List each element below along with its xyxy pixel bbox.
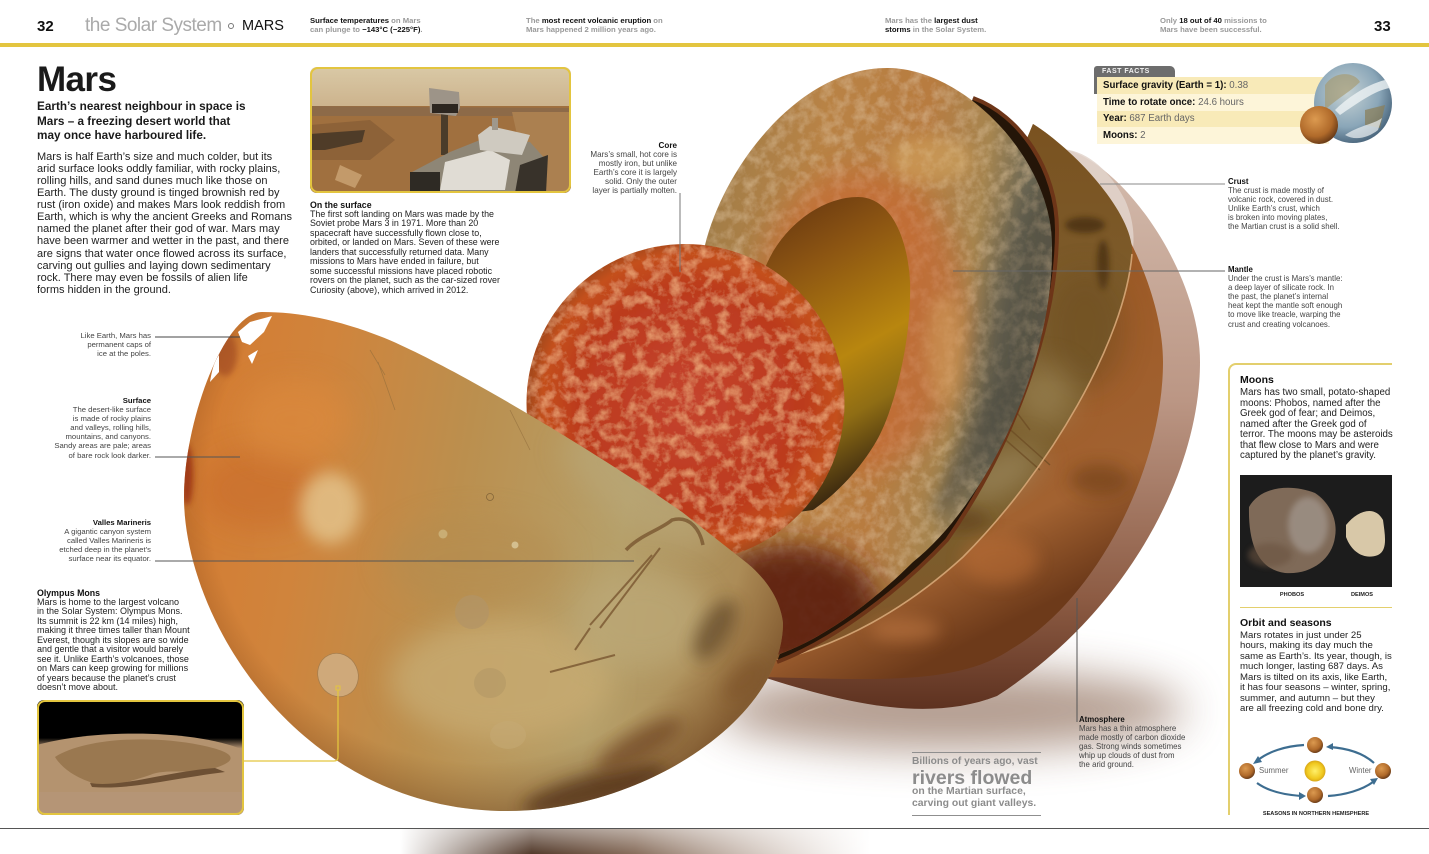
atmosphere label: Atmosphere (1079, 715, 1125, 724)
olympus mons photo (37, 700, 244, 815)
crust label: is broken into moving plates, (1228, 213, 1327, 222)
main body text: rock. There may even be fossils of alien life (37, 272, 248, 284)
moons text (1240, 387, 1393, 461)
fact row 4: Moons: 2 (1103, 130, 1146, 141)
rover body (412, 140, 546, 193)
surface label (54, 396, 151, 460)
orbit text: much longer, lasting 687 days. As (1240, 661, 1383, 672)
Valles Marineris canyon (626, 519, 703, 550)
moons text: Mars has two small, potato-shaped (1240, 387, 1390, 398)
core sphere (526, 244, 844, 562)
main body text: carving out gullies and laying down sedimentary (37, 260, 271, 272)
moons text: captured by the planet’s gravity. (1240, 450, 1376, 461)
phobos (1249, 488, 1336, 573)
intro: Earth’s nearest neighbour in space is (37, 100, 246, 113)
olympus mons body: doesn’t move about. (37, 682, 118, 692)
header fact 4: Mars have been successful. (1160, 25, 1262, 34)
on the surface body: rovers on the planet, such as the car-sized rover (310, 275, 500, 285)
crust label: Unlike Earth’s crust, which (1228, 204, 1320, 213)
section title: the Solar System (85, 15, 222, 36)
orbit text: hours, making its day much the (1240, 640, 1373, 651)
winter label: Winter (1349, 766, 1372, 775)
valles marineris label (59, 518, 151, 563)
mantle disc shading (736, 134, 1052, 654)
intro (37, 100, 246, 142)
moons text: Greek god of fear; and Deimos, (1240, 408, 1375, 419)
phobos caption: PHOBOS (1280, 592, 1304, 598)
shell surface markings (870, 217, 1130, 642)
polar caps label: permanent caps of (87, 340, 151, 349)
on the surface body: The first soft landing on Mars was made by the (310, 208, 494, 218)
core label: solid. Only the outer (605, 177, 677, 186)
rover head (429, 88, 460, 116)
valles marineris label: surface near its equator. (69, 554, 151, 563)
header fact 1: can plunge to −143°C (−225°F). (310, 25, 423, 34)
olympus mons body: in the Solar System: Olympus Mons. (37, 606, 183, 616)
pull quote: on the Martian surface, (912, 786, 1026, 797)
fast facts tab: FAST FACTS (1102, 68, 1150, 75)
moons heading: Moons (1240, 374, 1274, 386)
on the surface text (310, 200, 500, 295)
core cavity (740, 197, 910, 520)
atmosphere label: Mars has a thin atmosphere (1079, 724, 1176, 733)
olympus mons text (37, 588, 190, 692)
main body text: are signs that water once flowed across its surface, (37, 248, 286, 260)
main body text: rust (iron oxide) and makes Mars look reddish from (37, 199, 285, 211)
page number left: 32 (37, 18, 54, 35)
orbit diagram (1239, 737, 1391, 803)
dark plains (210, 458, 308, 526)
edge shading (184, 312, 783, 811)
on the surface body: Soviet probe Mars 3 in 1971. More than 20 (310, 218, 478, 228)
valles marineris label: etched deep in the planet’s (59, 545, 151, 554)
on the surface heading: On the surface (310, 200, 372, 210)
olympus mons body: Its summit is 22 km (14 miles) high, (37, 616, 178, 626)
on the surface body: orbited, or landed on Mars. Seven of these were (310, 237, 499, 247)
icon: earth (1314, 63, 1392, 143)
olympus mons body: and gentle that a visitor would barely (37, 644, 183, 654)
main body text: Earth. The dusty ground is tinged brownish red by (37, 187, 280, 199)
header fact 3 (885, 16, 986, 34)
header fact 4 (1160, 16, 1267, 34)
mantle label: Under the crust is Mars’s mantle: (1228, 274, 1343, 283)
crust label: Crust (1228, 177, 1248, 186)
pull quote: rivers flowed (912, 767, 1032, 789)
summer label: Summer (1259, 766, 1289, 775)
core label (590, 141, 677, 195)
olympus mons heading: Olympus Mons (37, 588, 100, 598)
mantle label: a deep layer of silicate rock. In (1228, 283, 1334, 292)
mantle label (1228, 265, 1343, 329)
fact row 3 (1097, 111, 1329, 127)
atmosphere label: made mostly of carbon dioxide (1079, 733, 1185, 742)
sun (1304, 760, 1326, 782)
fact row 2: Time to rotate once: 24.6 hours (1103, 97, 1244, 108)
pull quote: carving out giant valleys. (912, 798, 1036, 809)
polar caps label (80, 331, 152, 358)
surface label: and valleys, rolling hills, (70, 423, 151, 432)
surface texture lines (370, 350, 530, 450)
on the surface body: landers that successfully returned data. Many (310, 246, 489, 256)
main body text: Mars is half Earth’s size and much colder, but its (37, 151, 272, 163)
atmosphere layer (763, 149, 1200, 709)
tab edge (1094, 77, 1097, 94)
dark albedo regions (518, 758, 670, 811)
mars positions (1239, 737, 1391, 803)
orbit heading: Orbit and seasons (1240, 617, 1332, 629)
north polar ice (213, 332, 237, 376)
pale atmosphere highlight (1063, 149, 1134, 254)
orbit text: it has four seasons – winter, spring, (1240, 682, 1390, 693)
divider (1240, 607, 1392, 608)
Tharsis volcanoes (317, 653, 359, 697)
moons text: terror. The moons may be asteroids (1240, 429, 1393, 440)
rover photo (310, 67, 571, 193)
icon: mini mars (1300, 106, 1338, 144)
on the surface body: Curiosity (above), which arrived in 2012. (310, 284, 468, 294)
fact row 3: Year: 687 Earth days (1103, 113, 1195, 124)
surface label: is made of rocky plains (73, 414, 151, 423)
main body text: have been warmer and wetter in the past, and there (37, 235, 289, 247)
page baseline (0, 828, 1429, 829)
arrows (1257, 745, 1374, 796)
core label: Earth’s core it is largely (593, 168, 677, 177)
core label: Core (659, 141, 677, 150)
atmosphere label: the arid ground. (1079, 760, 1134, 769)
polar caps label: Like Earth, Mars has (80, 331, 151, 340)
polar caps label: ice at the poles. (97, 349, 151, 358)
olympus mons body: of years because the planet’s crust (37, 673, 176, 683)
orbit text: Mars rotates in just under 25 (1240, 630, 1362, 641)
olympus mons body: Mars is home to the largest volcano (37, 596, 179, 606)
header fact 3: storms in the Solar System. (885, 25, 986, 34)
fast facts (1094, 66, 1329, 144)
intro: Mars – a freezing desert world that (37, 114, 230, 128)
surface label: The desert-like surface (73, 405, 151, 414)
header fact 4: Only 18 out of 40 missions to (1160, 16, 1267, 25)
fast facts tab (1094, 66, 1175, 77)
header fact 3: Mars has the largest dust (885, 16, 978, 25)
orbit caption: SEASONS IN NORTHERN HEMISPHERE (1263, 811, 1369, 817)
ground shadow (400, 670, 1185, 854)
pull quote: Billions of years ago, vast (912, 756, 1038, 767)
surface label: Surface (123, 396, 151, 405)
mantle label: crust and creating volcanoes. (1228, 320, 1330, 329)
bullet (228, 23, 234, 29)
front hemisphere (184, 312, 783, 811)
crust thin edge line (777, 254, 1132, 660)
shell inner surface above crust line (760, 124, 1132, 660)
fact row 2 (1097, 94, 1329, 111)
core label: layer is partially molten. (592, 186, 677, 195)
fact row 1 (1097, 77, 1329, 94)
header fact 2 (526, 16, 663, 34)
moons text: that flew close to Mars and were (1240, 440, 1379, 450)
main body text: arid surface looks oddly familiar, with rocky plains, (37, 163, 280, 175)
header fact 1: Surface temperatures on Mars (310, 16, 421, 25)
deimos caption: DEIMOS (1351, 592, 1373, 598)
intro: may once have harboured life. (37, 129, 206, 142)
olympus mons body: on Mars can keep growing for millions (37, 663, 188, 673)
crust label: the Martian crust is a solid shell. (1228, 222, 1340, 231)
mantle disc (705, 68, 1052, 655)
pull quote (912, 752, 1041, 816)
header band rule (0, 43, 1429, 47)
icon: earth and mars size comparison (1300, 63, 1392, 144)
main body text: Earth, which is why the ancient Greeks and Romans (37, 211, 292, 223)
mantle label: Mantle (1228, 265, 1253, 274)
orbit text: summer, and autumn – but they (1240, 693, 1375, 704)
on the surface body (310, 208, 500, 295)
fact row 4 (1097, 127, 1329, 144)
rover mast (441, 113, 448, 155)
main body text: rolling hills, and sand dunes much like those on (37, 175, 268, 187)
mantle label: the past, the planet’s internal (1228, 292, 1328, 301)
atmosphere label (1079, 715, 1185, 769)
section name: MARS (242, 18, 284, 34)
moons photo (1240, 475, 1392, 587)
orbit text: are all freezing cold and bone dry. (1240, 703, 1384, 714)
on the surface body: missions to Mars have ended in failure, but (310, 256, 479, 266)
on the surface body: some successful missions have placed robotic (310, 266, 492, 276)
valles marineris label: called Valles Marineris is (67, 536, 151, 545)
valles marineris label: A gigantic canyon system (64, 527, 151, 536)
panel: moons and orbit (1228, 363, 1392, 815)
olympus mons body (37, 596, 190, 692)
title: Mars (37, 60, 116, 99)
deimos (1346, 511, 1385, 557)
crust label: volcanic rock, covered in dust. (1228, 195, 1333, 204)
main body text: named the planet after their god of war. Mars may (37, 223, 280, 235)
header fact 1 (310, 16, 423, 34)
moons text: moons: Phobos, named after the (1240, 398, 1381, 408)
olympus mons body: Everest, though its slopes are so wide (37, 635, 189, 645)
surface label: Sandy areas are pale; areas (54, 441, 151, 450)
mantle label: heat kept the mantle soft enough (1228, 301, 1342, 310)
pale plateau (300, 472, 360, 544)
core label: mostly iron, but unlike (599, 159, 677, 168)
leader lines (155, 184, 1225, 761)
olympus mons body: making it three times taller than Mount (37, 625, 190, 635)
core label: Mars’s small, hot core is (590, 150, 677, 159)
atmosphere label: whip up clouds of dust from (1079, 751, 1174, 760)
dark gap and rust rim of crust (777, 98, 1057, 662)
olympus mons body: see it. Unlike Earth’s volcanoes, those (37, 654, 189, 664)
header fact 2: Mars happened 2 million years ago. (526, 25, 656, 34)
crust label (1228, 177, 1340, 231)
header fact 2: The most recent volcanic eruption on (526, 16, 663, 25)
moons text: named after the Greek god of (1240, 418, 1367, 430)
outer crust shell (720, 124, 1163, 679)
main body text: forms hidden in the ground. (37, 284, 171, 296)
arrow heads (1253, 743, 1378, 800)
surface label: of bare rock look darker. (69, 451, 151, 460)
crust label: The crust is made mostly of (1228, 186, 1324, 195)
page number right: 33 (1374, 18, 1391, 35)
orbit text: Mars is tilted on its axis, like Earth, (1240, 672, 1387, 683)
surface label: mountains, and canyons. (66, 432, 151, 441)
atmosphere label: gas. Strong winds sometimes (1079, 742, 1181, 751)
orbit text (1240, 630, 1392, 714)
mantle label: to move like treacle, warping the (1228, 310, 1340, 319)
on the surface body: spacecraft have successfully flown close to, (310, 228, 482, 238)
main body text (37, 151, 292, 296)
orbit text: same as Earth’s. Its year, though, is (1240, 651, 1392, 662)
fact row 1: Surface gravity (Earth = 1): 0.38 (1103, 80, 1248, 91)
valles marineris label: Valles Marineris (93, 518, 151, 527)
